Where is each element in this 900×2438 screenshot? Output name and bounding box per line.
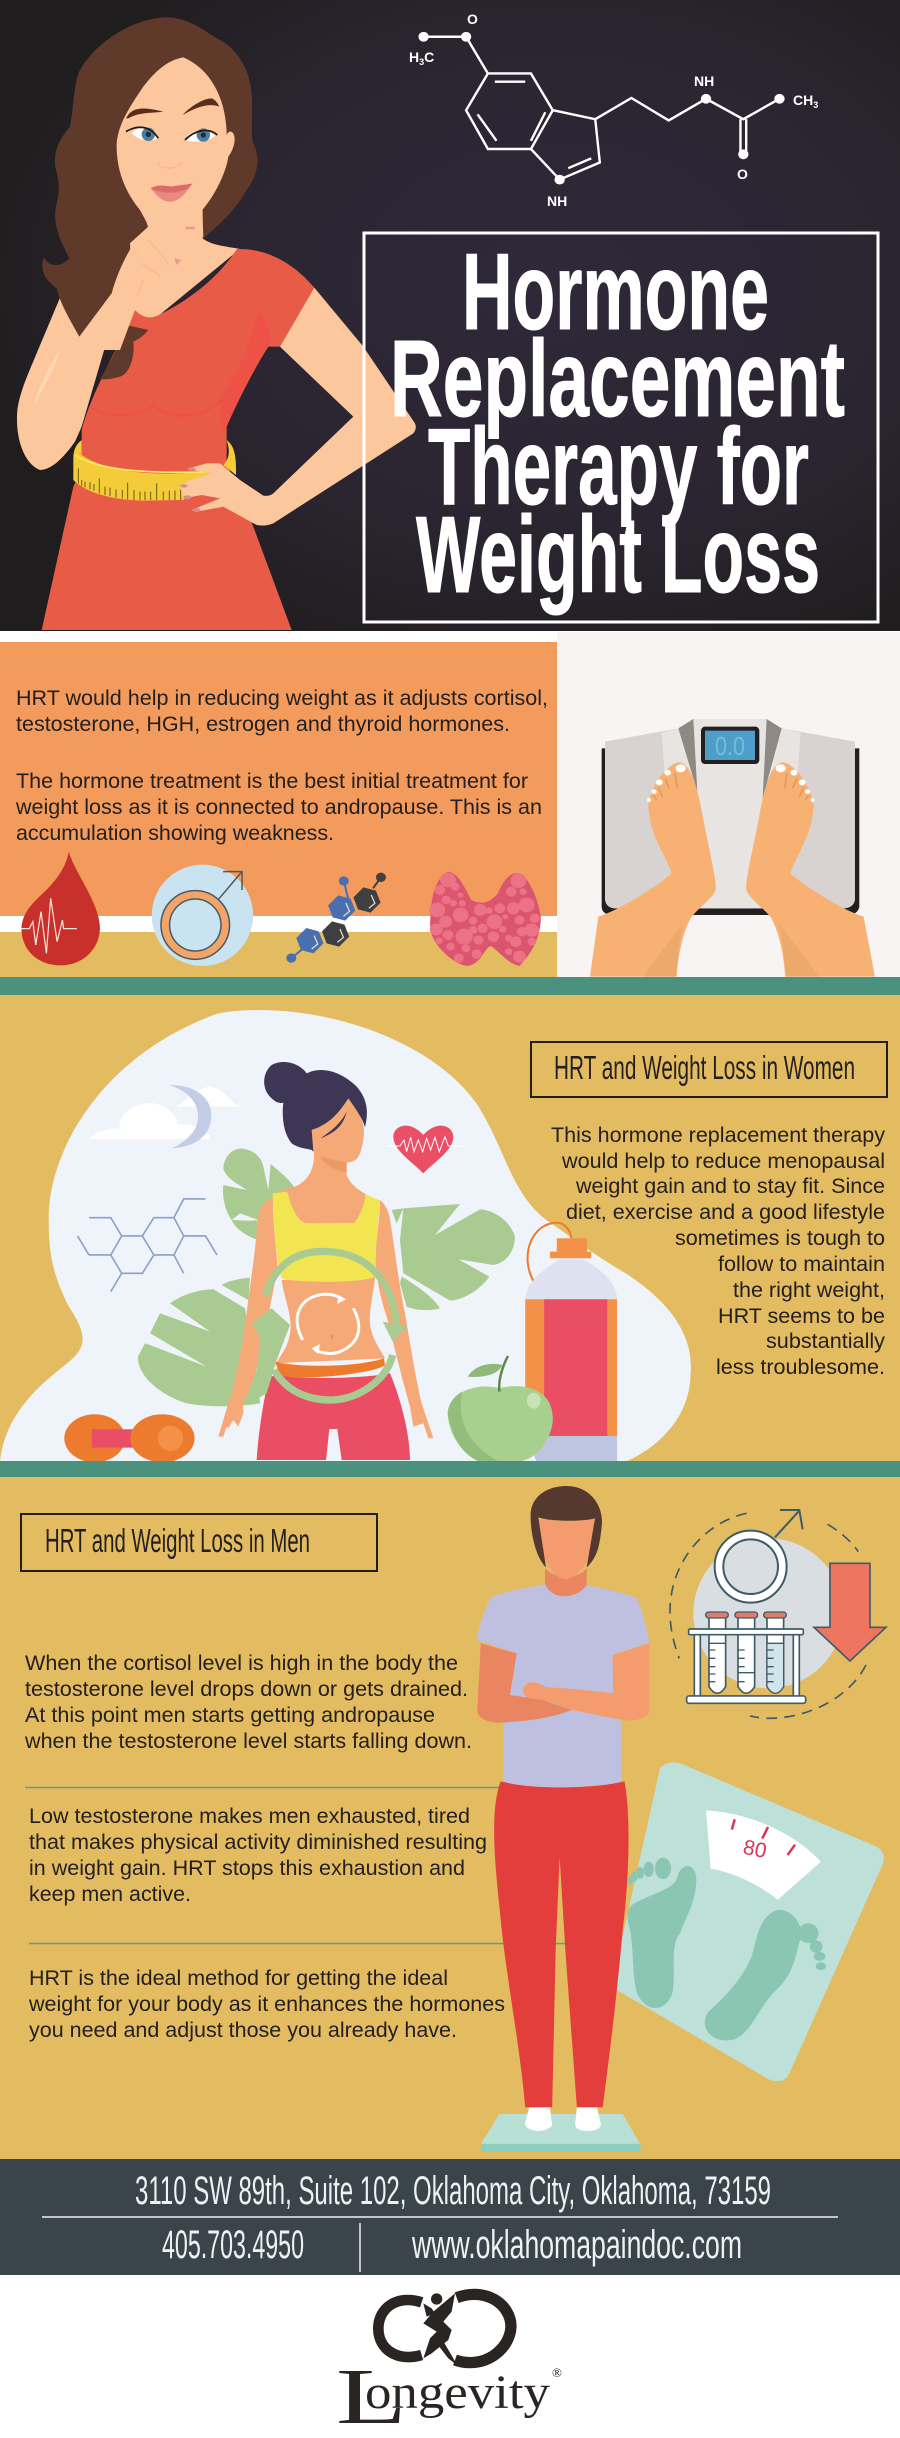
text: women paragraph: This hormone replacement therapy xyxy=(551,1124,886,1147)
panel: women xyxy=(0,1010,887,1462)
intro paragraph two xyxy=(15,770,542,845)
footer contact bar xyxy=(0,2159,900,2275)
text: women paragraph: substantially xyxy=(766,1330,886,1353)
heading: men xyxy=(21,1514,377,1571)
molecule labels: 3 xyxy=(419,57,424,67)
text: men paragraph two: in weight gain. HRT stops this exhaustion and xyxy=(29,1857,465,1880)
intro paragraph one xyxy=(16,687,548,736)
text: women paragraph: less troublesome. xyxy=(716,1356,885,1379)
white stripe xyxy=(0,916,557,932)
illustration: scale card with footprints xyxy=(611,1762,884,2081)
icon: male symbol xyxy=(152,865,253,966)
intro paragraph two: accumulation showing weakness. xyxy=(16,822,334,845)
scale number: 80 xyxy=(741,1836,769,1863)
text: women paragraph xyxy=(551,1124,886,1379)
molecule labels: O xyxy=(737,166,748,182)
icon: hormone molecule xyxy=(286,873,386,963)
intro panel xyxy=(0,687,557,966)
molecule diagram xyxy=(418,32,785,185)
logo: Longevity xyxy=(336,2293,562,2438)
icon: testosterone decline xyxy=(670,1510,886,1718)
website: www.oklahomapaindoc.com xyxy=(411,2223,742,2267)
panel: men xyxy=(21,1486,886,2152)
intro paragraph two: weight loss as it is connected to andropause. This is an xyxy=(15,796,542,819)
molecule labels: CH xyxy=(793,92,813,108)
molecule labels: O xyxy=(467,11,478,27)
text: men paragraph two: keep men active. xyxy=(29,1883,191,1906)
intro paragraph one: testosterone, HGH, estrogen and thyroid hormones. xyxy=(16,713,510,736)
text: women paragraph: HRT seems to be xyxy=(718,1305,885,1328)
illustration: man standing on scale xyxy=(477,1486,649,2152)
molecule labels: C xyxy=(424,49,434,65)
title box xyxy=(364,233,878,622)
illustration: women wellness background xyxy=(0,1010,691,1462)
text: men paragraph one: testosterone level drops down or gets drained. xyxy=(25,1678,468,1701)
scale reading: 0.0 xyxy=(715,731,745,761)
molecule labels: NH xyxy=(694,73,714,89)
molecule labels: 3 xyxy=(813,100,818,110)
text: women paragraph: sometimes is tough to xyxy=(675,1227,885,1250)
logo wordmark xyxy=(336,2352,562,2438)
phone: 405.703.4950 xyxy=(162,2223,304,2267)
illustration: woman with measuring tape xyxy=(17,17,416,630)
logo wordmark: ongevity xyxy=(365,2366,550,2419)
title xyxy=(390,231,845,616)
text: men paragraph one: when the testosterone level starts falling down. xyxy=(24,1730,472,1753)
heading: women xyxy=(531,1042,887,1097)
text: men paragraph one: At this point men starts getting andropause xyxy=(25,1704,435,1727)
heading: men: HRT and Weight Loss in Men xyxy=(45,1522,310,1559)
header panel xyxy=(0,0,900,631)
text: men paragraph one: When the cortisol level is high in the body the xyxy=(25,1652,458,1675)
text: men paragraph two xyxy=(29,1805,487,1906)
text: women paragraph: the right weight, xyxy=(733,1279,885,1302)
text: men paragraph one xyxy=(24,1652,472,1753)
text: men paragraph two: that makes physical activity diminished resulting xyxy=(29,1831,487,1854)
text: men paragraph three: weight for your body as it enhances the hormones xyxy=(28,1993,505,2016)
icon: heart xyxy=(387,1126,462,1173)
icon: thyroid gland xyxy=(429,872,541,966)
text: women paragraph: diet, exercise and a good lifestyle xyxy=(566,1201,885,1224)
text: women paragraph: would help to reduce menopausal xyxy=(561,1150,885,1173)
logo wordmark: ® xyxy=(552,2365,562,2380)
logo mark xyxy=(378,2293,511,2365)
molecule labels: H xyxy=(409,49,419,65)
text: men paragraph three: you need and adjust those you already have. xyxy=(29,2019,457,2042)
text: men paragraph three xyxy=(28,1967,505,2042)
text: women paragraph: weight gain and to stay fit. Since xyxy=(575,1175,885,1198)
illustration: bottle, apple and dumbbell xyxy=(64,1223,617,1462)
molecule labels: NH xyxy=(547,193,567,209)
molecule labels xyxy=(409,11,818,209)
intro paragraph two: The hormone treatment is the best initial treatment for xyxy=(16,770,528,793)
icon: blood drop xyxy=(21,852,100,965)
illustration: woman with metabolism arrows xyxy=(138,1062,515,1460)
divider band xyxy=(0,1461,900,1477)
text: men paragraph two: Low testosterone makes men exhausted, tired xyxy=(29,1805,470,1828)
intro paragraph one: HRT would help in reducing weight as it adjusts cortisol, xyxy=(16,687,548,710)
logo wordmark: L xyxy=(336,2352,407,2438)
text: men paragraph three: HRT is the ideal method for getting the ideal xyxy=(29,1967,448,1990)
text: women paragraph: follow to maintain xyxy=(718,1253,885,1276)
illustration: feet on bathroom scale xyxy=(590,719,875,977)
